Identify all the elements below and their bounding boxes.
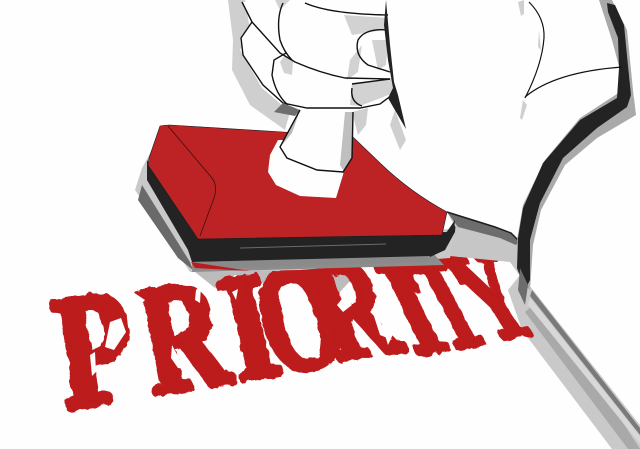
small grey accents at upper right xyxy=(518,0,541,120)
letter O: O xyxy=(237,234,362,405)
stamp base: red under strip xyxy=(191,262,250,271)
hand xyxy=(240,0,406,129)
stamp fold line xyxy=(168,126,216,236)
stamp shadow xyxy=(135,135,458,272)
finger grey shading xyxy=(275,0,396,106)
letter R: R xyxy=(290,227,419,391)
stamp right grey wedge xyxy=(435,212,530,290)
stamp base: dark edge xyxy=(147,160,456,269)
letter Y: Y xyxy=(418,224,562,367)
black pointed sliver xyxy=(384,0,406,129)
letter P: P xyxy=(43,254,145,443)
handle: lower grey tube xyxy=(508,275,640,449)
letter I: I xyxy=(205,241,293,412)
shadow patches under stamp xyxy=(190,268,360,292)
letter I: I xyxy=(358,231,466,383)
letter R: R xyxy=(127,246,241,428)
finger line at upper right xyxy=(525,2,622,98)
fingers xyxy=(240,0,397,108)
handle: dark curved band xyxy=(517,0,636,305)
white press mark on stamp xyxy=(268,140,350,198)
finger outlines xyxy=(241,2,396,108)
distress marks on letters xyxy=(90,286,395,376)
wrist xyxy=(274,103,353,172)
stamp red top xyxy=(148,125,447,239)
letter T: T xyxy=(386,230,512,378)
stamped word xyxy=(43,224,562,443)
hand shadow xyxy=(228,0,406,150)
